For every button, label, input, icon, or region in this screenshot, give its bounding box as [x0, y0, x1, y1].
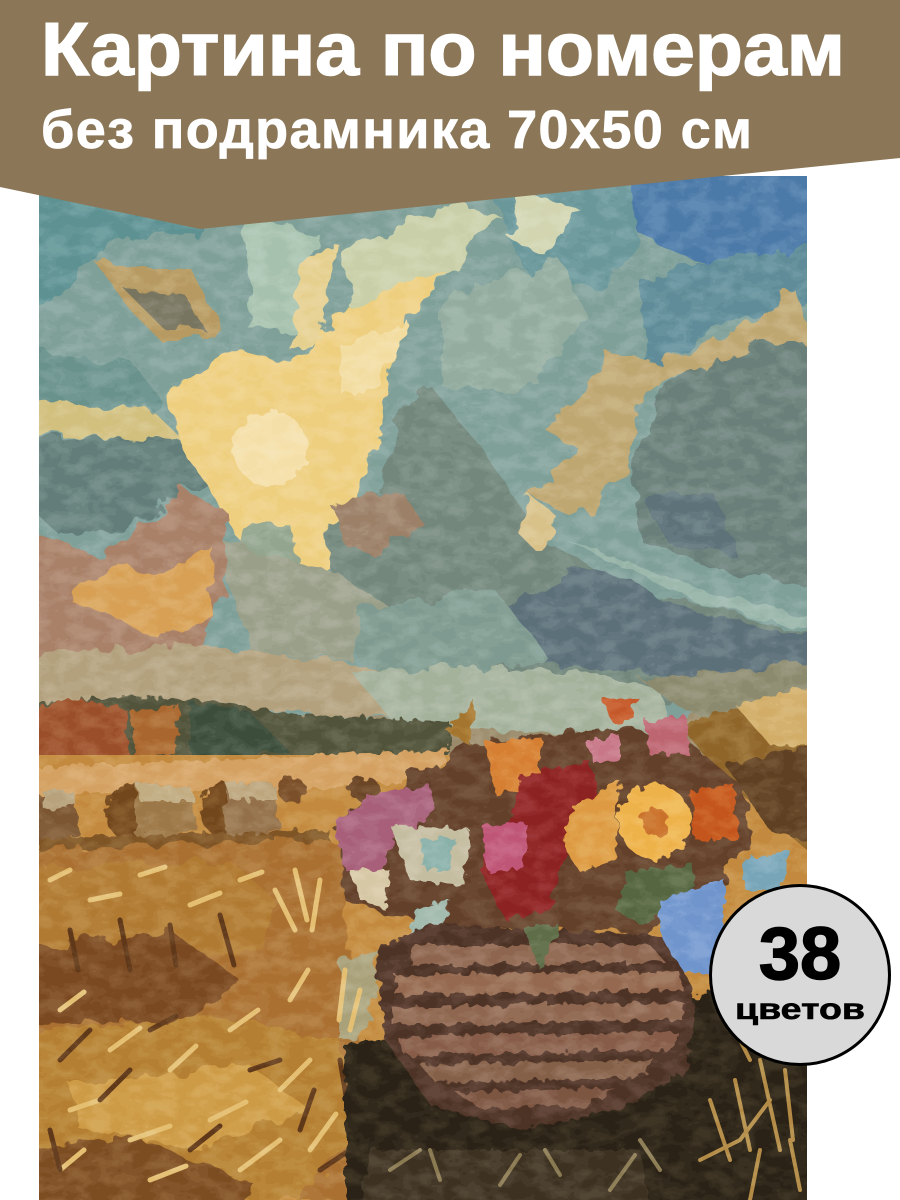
sun	[165, 240, 445, 590]
sky	[39, 176, 807, 720]
badge: 38 colours	[710, 886, 890, 1064]
sun core	[233, 410, 307, 486]
badge circle	[710, 886, 890, 1064]
sunflower	[618, 785, 692, 859]
sunset clouds left	[20, 490, 830, 735]
title: Картина по номерам	[41, 7, 845, 91]
header banner	[0, 0, 900, 229]
basket	[375, 925, 695, 1130]
badge number: 38	[759, 912, 841, 995]
wheat sheaf right	[345, 680, 830, 1200]
tree line	[39, 694, 452, 755]
painterly grain overlay	[39, 176, 807, 1200]
foreground grass	[20, 840, 380, 1200]
storm clouds	[215, 290, 830, 700]
bouquet mass	[335, 725, 750, 935]
dark strands	[50, 915, 350, 1170]
field	[20, 750, 830, 1200]
badge label: цветов	[735, 993, 865, 1026]
light strands	[50, 867, 360, 1180]
banner shape	[0, 0, 900, 229]
grass strokes	[50, 867, 360, 1180]
hay bales	[30, 777, 381, 852]
flower bouquet	[335, 698, 790, 975]
painting base	[302, 712, 704, 755]
subtitle: без подрамника 70х50 см	[41, 100, 752, 160]
straw strokes in the dark corner	[388, 1042, 802, 1200]
